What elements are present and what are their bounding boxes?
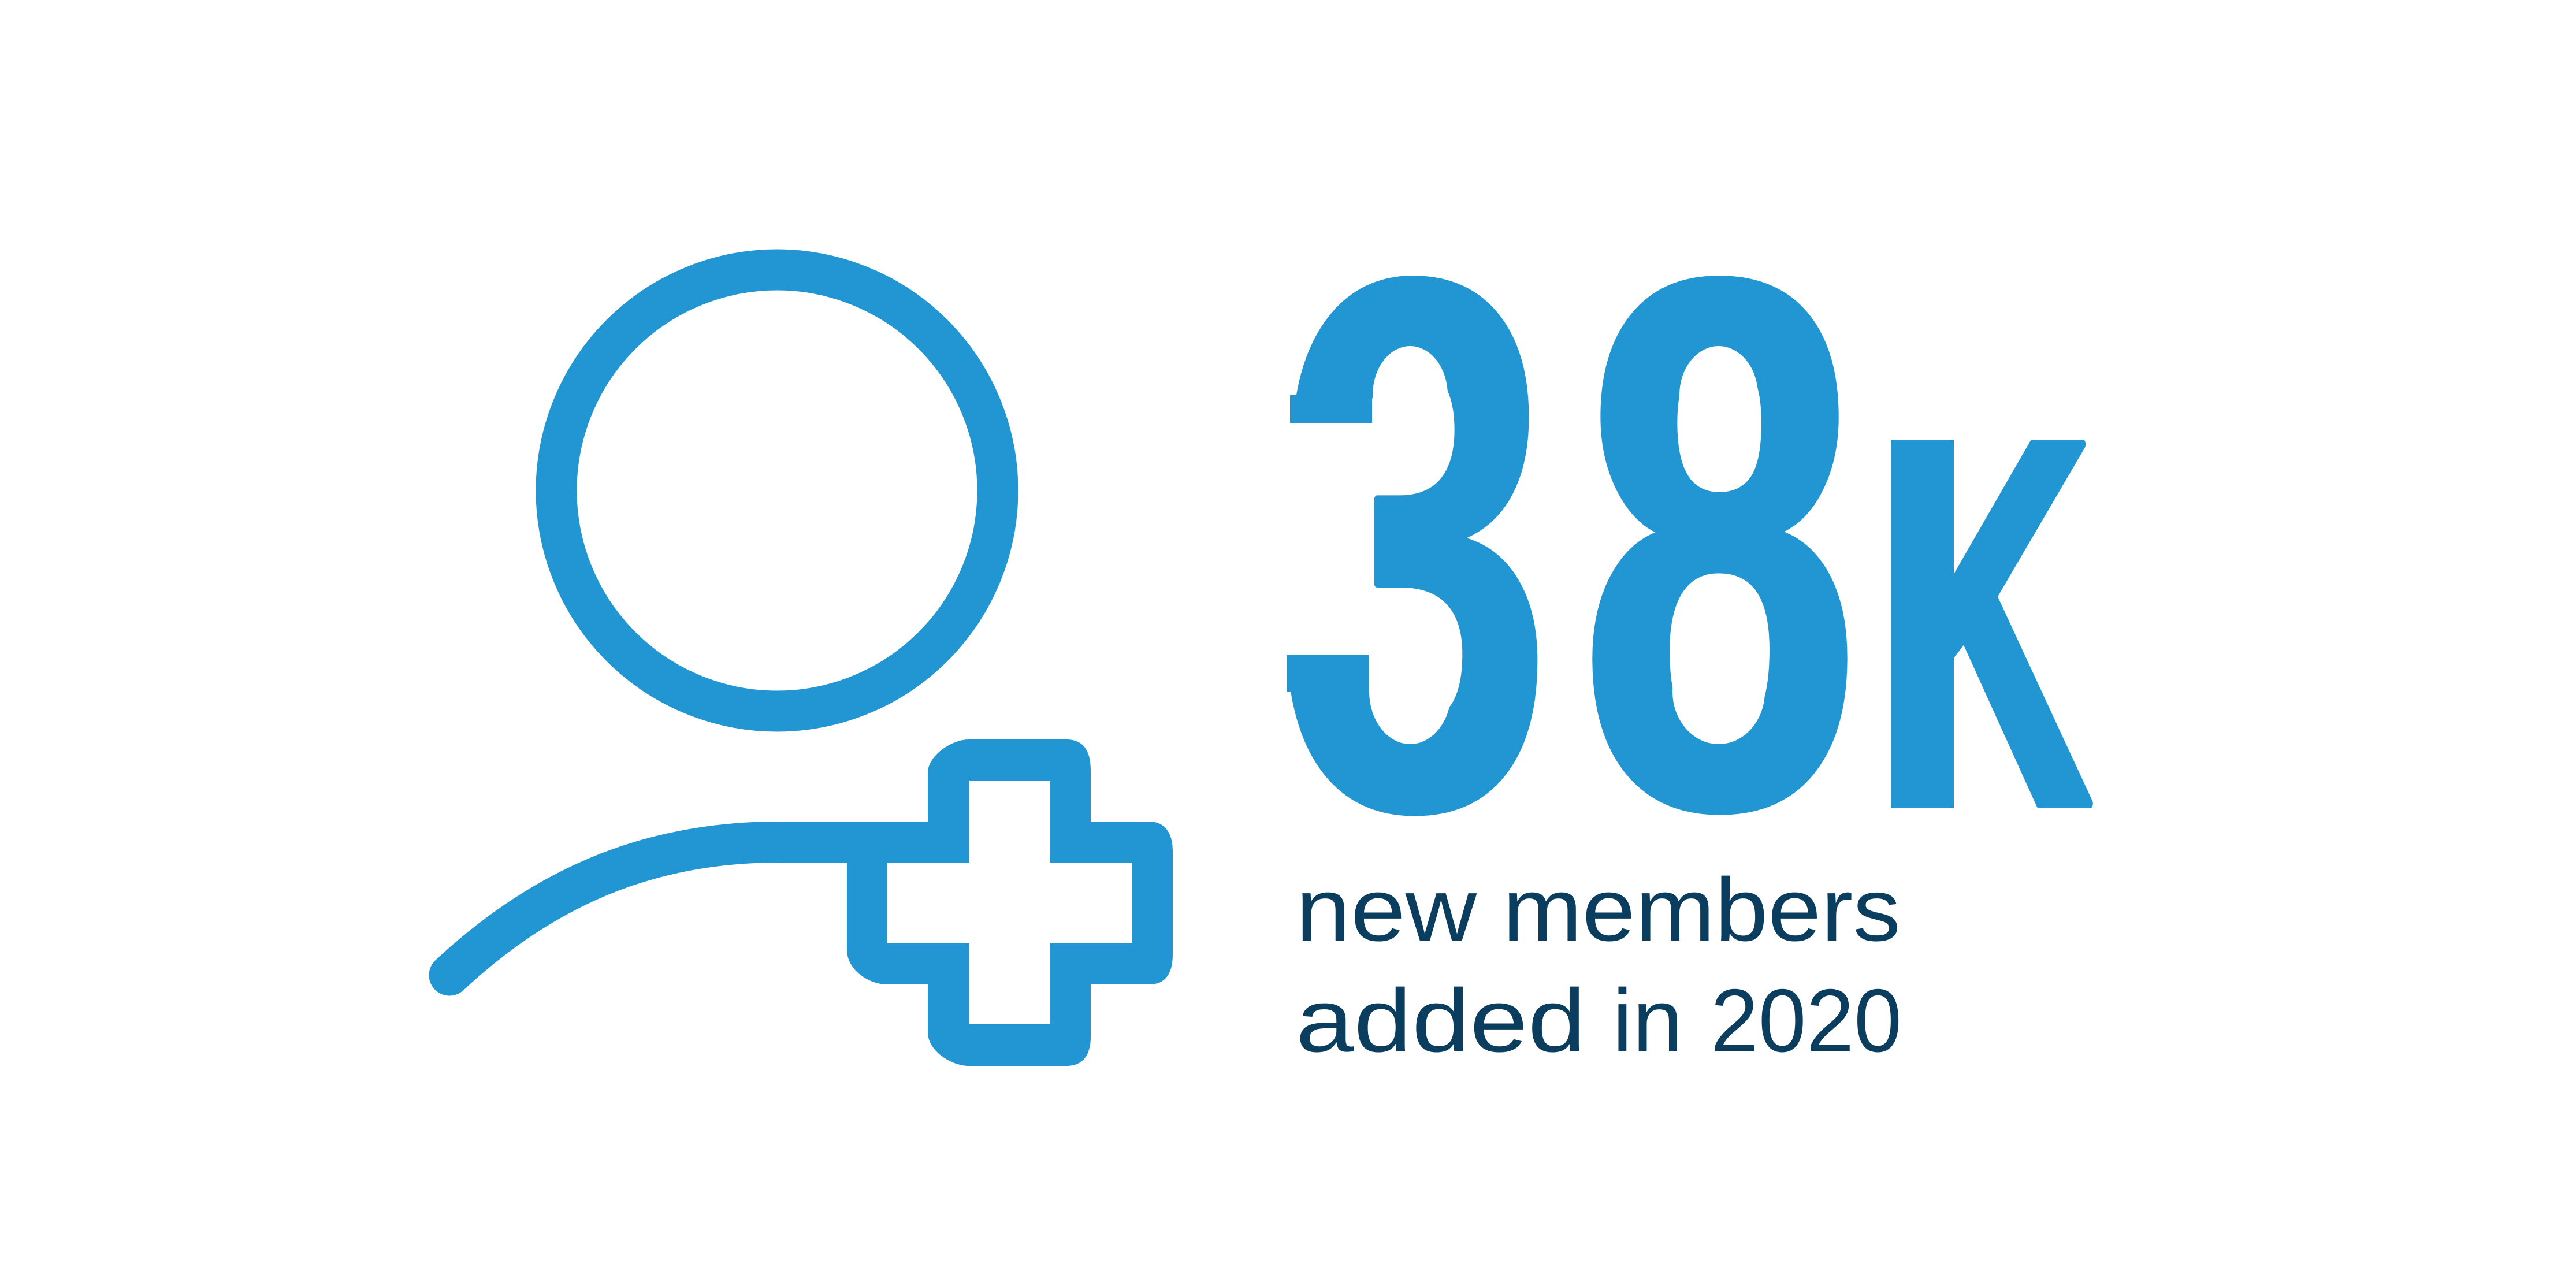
caption line 2: 2020 (1711, 971, 1902, 1071)
digit 8: 8 (1579, 126, 1860, 962)
caption line 1: members (1503, 860, 1901, 960)
caption line 2 (1296, 971, 1902, 1071)
caption: new members added in 2020 (1296, 860, 1902, 1071)
digit 3: 3 (1279, 126, 1552, 962)
icon: new member person with plus (449, 270, 1173, 1066)
caption line 2: in (1612, 971, 1683, 1071)
headline number: 38K (1279, 126, 2093, 962)
caption line 2: added (1296, 971, 1586, 1071)
icon part: plus sign outline (847, 739, 1173, 1066)
caption line 1 (1296, 860, 1901, 960)
caption line 1: new (1296, 860, 1477, 960)
letter K: K (1875, 330, 2093, 915)
icon part: person head ring (556, 270, 998, 711)
icon part: person shoulder line (449, 842, 930, 975)
